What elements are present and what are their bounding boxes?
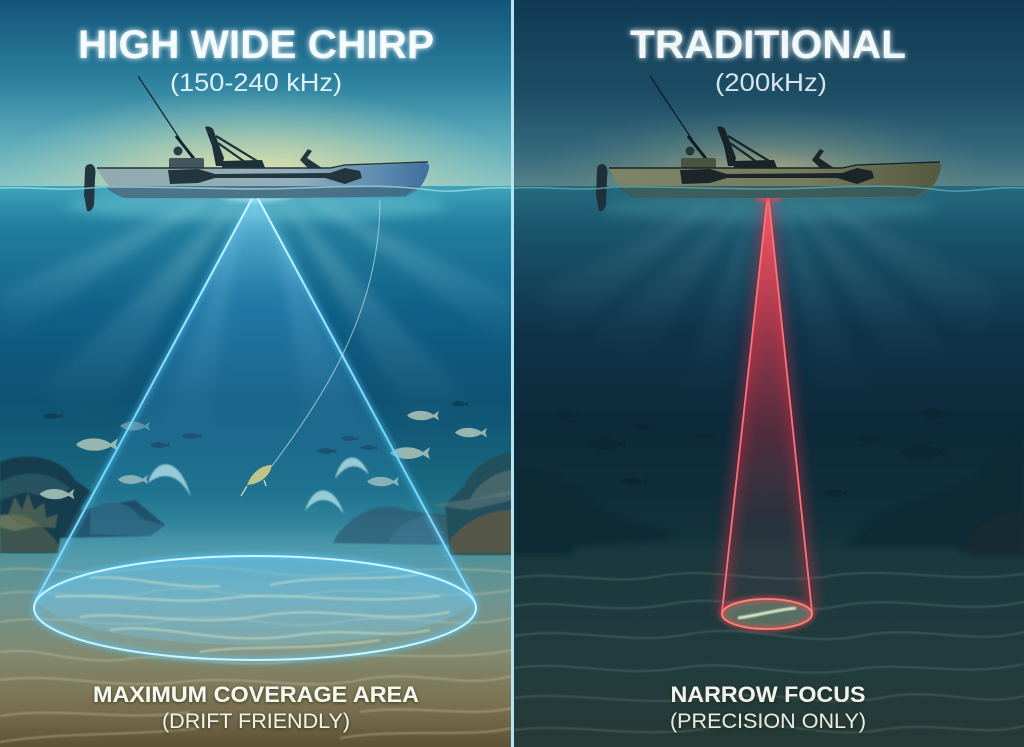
sonar beam [722, 192, 812, 627]
paddle [168, 168, 362, 184]
water [0, 186, 512, 556]
water [514, 186, 1024, 334]
coverage ellipse [34, 556, 476, 660]
seabed sand [514, 556, 1024, 747]
hull [609, 163, 941, 198]
title: HIGH WIDE CHIRP [78, 23, 434, 67]
sunlight rays [598, 214, 944, 307]
caption: MAXIMUM COVERAGE AREA [93, 682, 419, 707]
sonar arches [148, 457, 369, 514]
caption [670, 682, 866, 733]
steering console [300, 149, 321, 168]
subtitle: (200kHz) [715, 69, 827, 97]
waterline [514, 186, 1024, 191]
beam origin glow [750, 198, 786, 205]
dark fish [557, 409, 951, 497]
seabed sand [0, 525, 512, 747]
sonar beam cone [36, 193, 474, 645]
sand ripples [0, 566, 512, 742]
water sparkle [218, 198, 292, 204]
kayak [84, 76, 429, 211]
cooler [169, 158, 204, 168]
sky [514, 0, 1024, 190]
title: TRADITIONAL [630, 23, 906, 67]
sand ripples [514, 573, 1024, 733]
seat [717, 126, 736, 166]
rocks [515, 510, 1023, 556]
rudder [84, 164, 96, 211]
sky [0, 0, 512, 190]
caption [93, 682, 419, 733]
seat [205, 126, 224, 166]
caption: (DRIFT FRIENDLY) [162, 710, 350, 733]
waterline [0, 186, 512, 191]
kayak [596, 76, 941, 211]
panel: high wide chirp [0, 0, 526, 747]
cooler [681, 158, 716, 172]
fishing line and lure [241, 200, 380, 496]
fish school [40, 411, 487, 499]
caption: (PRECISION ONLY) [670, 710, 866, 733]
panel divider [511, 0, 514, 747]
surface shimmer [598, 194, 938, 222]
distant dark fish [43, 401, 469, 454]
coverage ellipse [722, 599, 812, 629]
surface shimmer [66, 190, 446, 222]
paddle [680, 168, 874, 184]
panel: traditional [514, 0, 1024, 747]
fishing rod [138, 76, 192, 158]
rudder [596, 164, 608, 211]
subtitle: (150-240 kHz) [170, 69, 342, 97]
steering console [812, 149, 834, 170]
rocks right [333, 452, 512, 555]
sunlight rays [3, 204, 509, 382]
hull [97, 163, 429, 198]
rocks left [0, 457, 165, 553]
fishing rod [650, 76, 709, 165]
caption: NARROW FOCUS [670, 682, 866, 707]
